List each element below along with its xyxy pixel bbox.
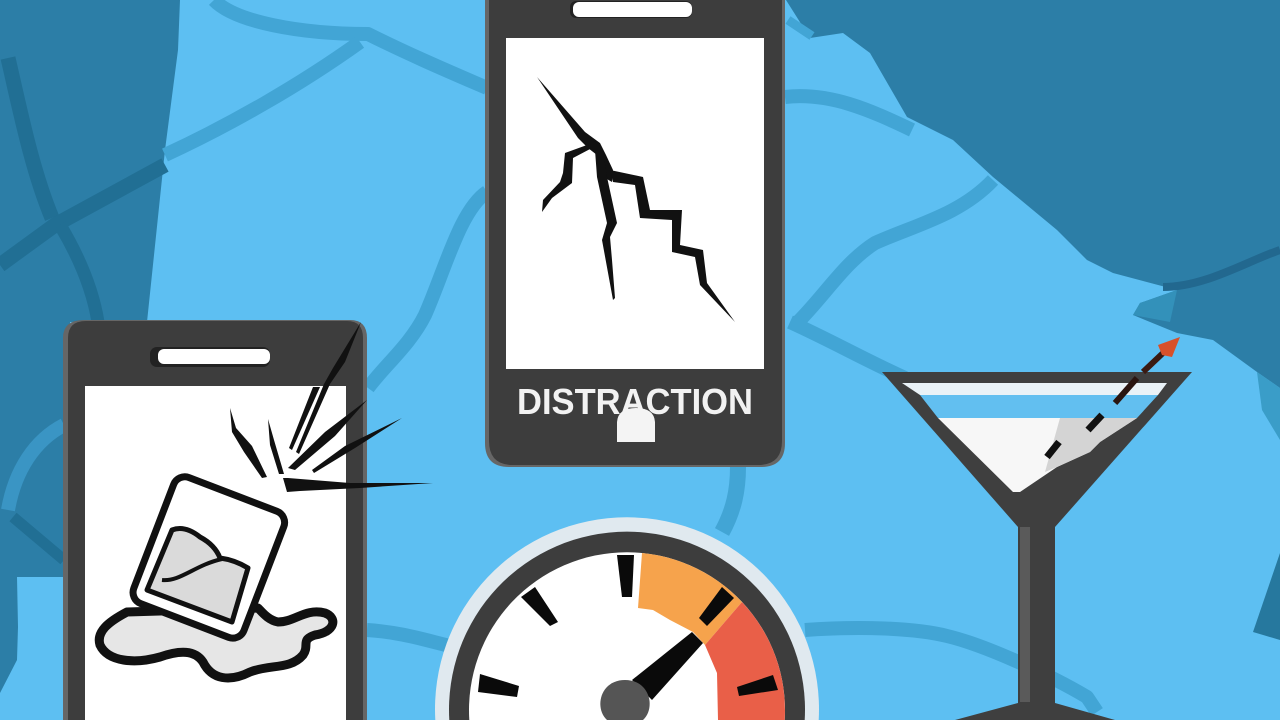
- red zone: [705, 602, 785, 720]
- phone: distraction with cracked screen: [485, 0, 785, 467]
- tilted glass: [130, 473, 288, 642]
- liquid: [147, 529, 248, 622]
- impact lines: [230, 322, 433, 492]
- stem and base: [955, 523, 1115, 720]
- glass bowl: [882, 372, 1192, 527]
- cracked white screen: [506, 38, 764, 369]
- phone: spilled drink: [63, 320, 433, 720]
- orange zone: [638, 553, 742, 645]
- tick marks: [478, 555, 778, 697]
- home button: [617, 408, 655, 442]
- speedometer gauge: [435, 517, 819, 720]
- spilled puddle: [99, 608, 333, 678]
- white screen: [85, 386, 346, 720]
- needle: [632, 632, 703, 700]
- martini glass: [882, 337, 1192, 720]
- cocktail pick: [1047, 337, 1180, 457]
- hub: [600, 680, 650, 720]
- label: distraction: DISTRACTION: [517, 381, 753, 422]
